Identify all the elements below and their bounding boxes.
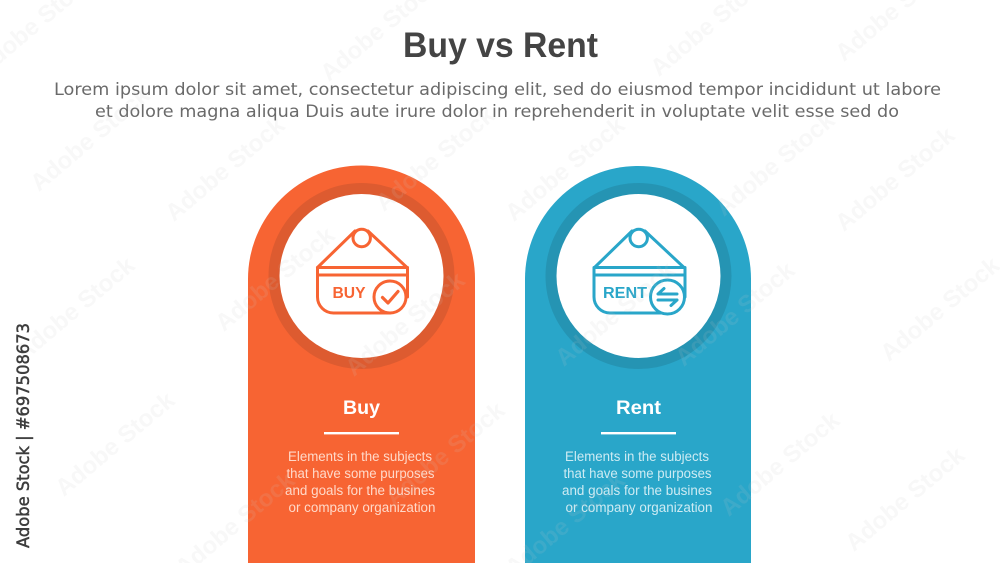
divider: buy xyxy=(324,432,399,434)
description: buy: or company organization xyxy=(288,500,436,515)
description: rent: Elements in the subjects xyxy=(565,449,709,464)
watermark pattern: Adobe Stock xyxy=(840,441,971,557)
heading: rent: Rent xyxy=(616,398,662,419)
description: rent: and goals for the busines xyxy=(562,483,712,498)
watermark pattern: Adobe Stock xyxy=(500,111,631,227)
ring: buy xyxy=(268,183,454,369)
watermark pattern: Adobe Stock xyxy=(50,386,181,502)
watermark pattern: Adobe Stock xyxy=(715,406,846,522)
icon: buy sign: BUY xyxy=(332,285,366,302)
title: Buy vs Rent xyxy=(403,26,598,65)
watermark pattern: Adobe Stock xyxy=(160,111,291,227)
panel: buy xyxy=(248,165,475,563)
watermark pattern: Adobe Stock xyxy=(370,101,501,217)
watermark pattern: Adobe Stock xyxy=(830,121,961,237)
icon circle: buy xyxy=(280,194,444,358)
watermark pattern: Adobe Stock xyxy=(25,81,156,197)
description: buy: and goals for the busines xyxy=(285,483,435,498)
watermark pattern: Adobe Stock xyxy=(670,256,801,372)
description: rent: that have some purposes xyxy=(564,466,712,481)
subtitle text block: Lorem ipsum dolor sit amet, consectetur adipiscing elit, sed do eiusmod tempor incididunt ut labore xyxy=(54,80,941,100)
icon: buy sign xyxy=(318,229,408,313)
description: rent xyxy=(562,449,712,515)
subtitle text block: et dolore magna aliqua Duis aute irure dolor in reprehenderit in voluptate velit esse sed do xyxy=(95,102,899,122)
heading: buy: Buy xyxy=(343,398,380,419)
panel shape: buy xyxy=(248,165,475,563)
watermark pattern: Adobe Stock xyxy=(380,396,511,512)
description: buy: Elements in the subjects xyxy=(288,449,432,464)
watermark pattern: Adobe Stock xyxy=(340,266,471,382)
description: buy: that have some purposes xyxy=(286,466,435,481)
panel shape: rent xyxy=(525,166,751,563)
panel: rent xyxy=(525,166,751,563)
watermark pattern: Adobe Stock xyxy=(710,106,841,222)
description: buy xyxy=(285,449,436,515)
icon: rent sign xyxy=(594,229,685,314)
watermark pattern: Adobe Stock xyxy=(210,221,341,337)
watermark pattern: Adobe Stock xyxy=(550,256,681,372)
watermark pattern: Adobe Stock xyxy=(10,251,141,367)
ring: rent xyxy=(546,183,732,369)
stock watermark id: Adobe Stock | #697508673 xyxy=(14,323,34,548)
icon circle: rent xyxy=(556,194,720,358)
subtitle text block xyxy=(54,80,941,122)
icon: rent sign: RENT xyxy=(603,285,647,302)
description: rent: or company organization xyxy=(566,500,712,515)
divider: rent xyxy=(601,432,676,434)
